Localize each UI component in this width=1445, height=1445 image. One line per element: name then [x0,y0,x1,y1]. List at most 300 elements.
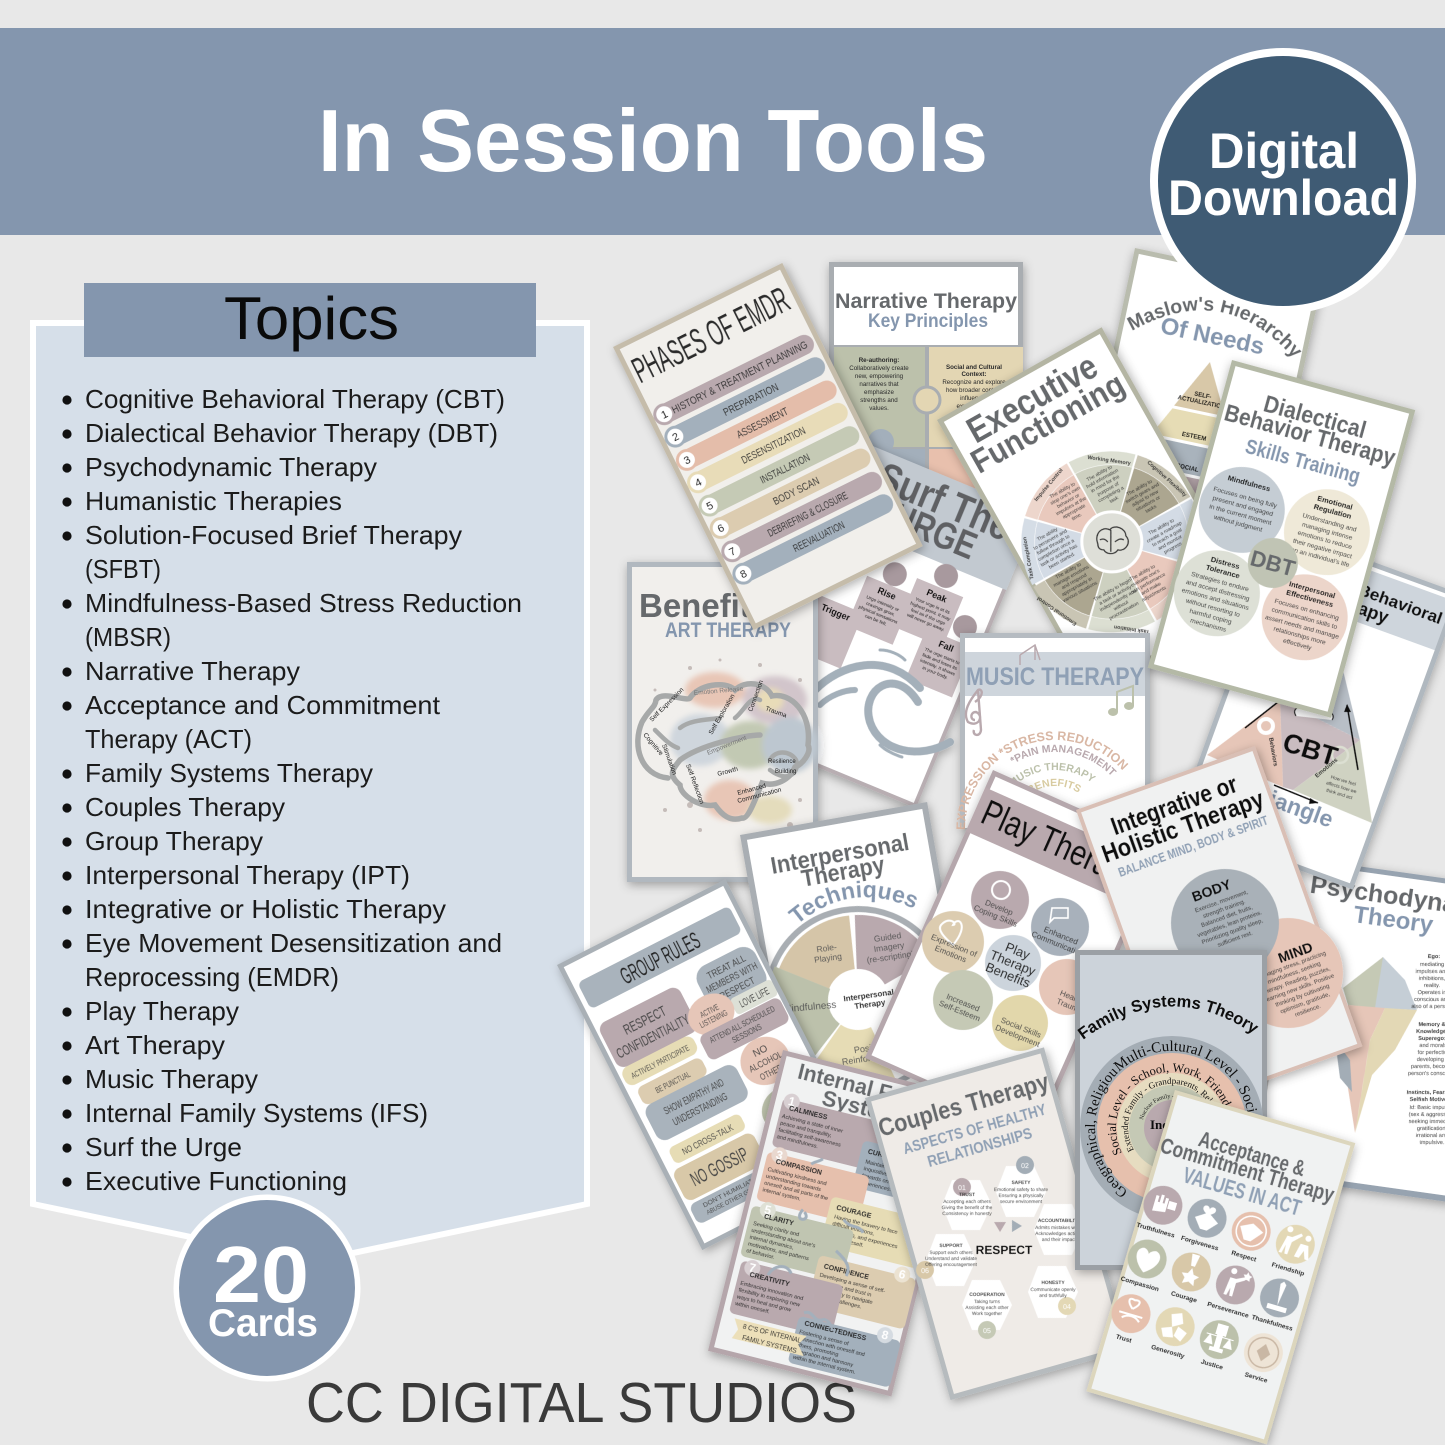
benefit circles: Coping Skills [972,903,1019,929]
topics list: Group Therapy [85,826,263,856]
hexagon diagram: Consistency in honesty [942,1211,992,1217]
peak step: Peak [925,587,949,605]
card: interpersonal therapy techniques: Therapy [799,851,887,893]
circle: body: sufficient rest. [1217,930,1254,949]
hexagon diagram [916,1156,1084,1339]
wheel: Working Memory [1087,455,1131,467]
pie: Positive [853,1041,886,1055]
benefit circles: Emotions [933,944,968,964]
topics list: Eye Movement Desensitization and [85,928,502,958]
block: connectedness: Fostering a sense of [798,1329,849,1347]
wheel: situations or [1135,495,1162,513]
circle: mind [1233,918,1344,1028]
circle: distress tolerance: emotions and situations [1181,587,1250,612]
block: clarity: internal dynamics, [749,1235,795,1251]
card: music therapy [954,630,1157,836]
card: acceptance and commitment therapy: Commitment Therapy [1157,1133,1338,1208]
circle: interpersonal effectiveness: Effectiveness [1285,588,1334,609]
circle: body: vegetables, lean proteins. [1197,910,1263,939]
pie: Guided [873,930,902,944]
card: narrative therapy: Collaboratively create [849,365,909,372]
card: integrative or holistic therapy [1076,732,1402,1110]
iceberg notes: mediating [1420,962,1444,968]
circle: mind: learning new skills. Positive [1265,973,1336,1004]
circle: mind: Managing stress, practicing [1256,951,1327,981]
circle: mindfulness: Focuses on being fully [1213,486,1278,510]
block: creativity: Embracing innovation and [739,1281,804,1302]
benefit circles: Increased [945,992,981,1013]
topics list: Mindfulness-Based Stress Reduction [85,588,522,618]
card: group rules [557,879,871,1250]
card: music therapy: MUSIC THERAPY [966,663,1144,691]
hexagon diagram: Communicate openly [1030,1287,1076,1293]
phase 8: REEVALUATION [791,519,847,555]
triangle: Emotions [1314,757,1340,780]
card: acceptance and commitment therapy: Acceptance & [1196,1126,1308,1181]
icon: generosity [1148,1302,1199,1361]
iceberg notes [1407,954,1445,1146]
hexagon diagram: Giving the benefit of the [942,1205,993,1211]
pie: Interpersonal [843,988,894,1004]
benefit circles: Social Skills [999,1016,1042,1040]
fall step: in your body. [921,665,949,681]
phase 4: DESENSITIZATION [740,425,808,467]
wheel: task [1109,495,1120,505]
benefit circles: Development [994,1023,1042,1049]
peak step: feel as if the urge [910,607,946,627]
wheel: follow through to [1036,534,1071,557]
block: courage: Having the bravery to face [833,1214,898,1236]
circle: emotional regulation [1274,479,1380,585]
rule blobs: MEMBERS WITH [705,961,760,996]
peak step: Your urge is at its [914,597,950,616]
icon: thankfulness [1251,1273,1306,1333]
block: creativity: ways to heal and grow [735,1294,792,1314]
wheel: Task Initiation [1114,623,1150,634]
pie: (re-scripting) [866,949,915,965]
block: calmness: 1 [787,1094,797,1109]
icon: brain with labels: Stimulation [660,743,678,776]
circle: emotional regulation: Regulation [1313,502,1353,521]
wheel: Cognitive Flexibility [1146,460,1187,498]
trigger step: Trigger [820,602,852,623]
hexagon diagram: secure environment [1000,1199,1043,1205]
wheel: stop one's own [1050,485,1082,507]
icon: brain with labels: Communication [737,786,783,805]
topics list: Executive Functioning [85,1166,347,1196]
card: play therapy benefits [843,760,1183,1142]
block: compassion [756,1145,872,1225]
icon: forgiveness [1180,1194,1232,1253]
icon: brain with labels: Enhanced [737,782,767,797]
icon: truthfulness [1136,1181,1188,1240]
topics list: Surf the Urge [85,1132,242,1162]
block: confidence [807,1246,919,1330]
block: creativity: within oneself. [733,1301,771,1316]
card: psychodynamic theory: Theory [1352,901,1435,939]
benefits arcs: BENEFITS [1029,778,1081,792]
block: clarity: of behavior. [746,1248,775,1261]
block: clarity: CLARITY [763,1213,795,1228]
circle: distress tolerance: Strategies to endure [1190,571,1250,593]
icon: music notes [966,645,1133,735]
triangle: How we feel [1330,775,1356,788]
topics list: Acceptance and Commitment [85,690,441,720]
icon: trust [1104,1289,1155,1348]
card: benefits of art therapy: ART THERAPY [665,619,791,642]
rule blobs: NO [751,1043,770,1060]
card: dialectical behavior therapy: Dialectical [1261,391,1369,444]
fall step: intensity. It shows [919,658,956,678]
icon: courage: Courage [1170,1290,1198,1305]
block: compassion: COMPASSION [775,1159,822,1177]
topics list: Family Systems Therapy [85,758,373,788]
topics list: Humanistic Therapies [85,486,342,516]
phase 3: ASSESSMENT [735,406,791,441]
benefit circles: Develop [984,898,1014,917]
block: connectedness: 8 [880,1328,890,1343]
block: clarity: understanding about one's [751,1228,816,1250]
heading: topics: Topics [224,285,399,352]
card: narrative therapy: narratives that [859,381,899,388]
hexagon diagram: Emotional safety to share [994,1187,1048,1193]
benefit circles: Trauma [1055,997,1084,1016]
brand name: CC DIGITAL STUDIOS [306,1371,857,1435]
phase 2: PREPARATION [721,381,781,419]
hexagon diagram: HONESTY [1041,1280,1065,1286]
icon: brain with labels [638,679,809,819]
wheel: and respond [1061,572,1088,591]
block: clarity [740,1198,856,1281]
wheel: The ability to [1049,481,1077,500]
card: narrative therapy: how broader context [946,387,1002,394]
wheel: adjust to new [1131,489,1160,509]
card: narrative therapy: Recognize and explore [942,379,1006,386]
rise step: physical sensations [858,604,899,626]
phase 1: HISTORY & TREATMENT PLANNING [670,339,810,416]
topics list: Art Therapy [85,1030,225,1060]
iceberg notes: impulsive. [1420,1140,1445,1146]
wheel: The ability to [1126,479,1154,498]
badge: digital download [1150,48,1416,314]
title: In Session Tools [318,91,988,190]
phase 4: 4 [693,476,704,490]
card: couples therapy: RELATIONSHIPS [926,1125,1035,1171]
icon: service: Service [1244,1371,1269,1385]
icon: brain with labels: Empowerment [706,735,748,757]
rule blobs: NO GOSSIP [687,1144,752,1191]
phase 5 [695,422,863,520]
card: cbt triangle: CBT Triangle [1195,760,1337,833]
circle: emotional regulation: on an individual's life [1290,546,1350,569]
icon: friendship [1268,1220,1320,1279]
rise step: Urge intensity or [865,595,899,613]
wheel: completion once a [1037,538,1076,563]
rule blobs: RESPECT [621,1003,669,1039]
circle: distress tolerance: mechanisms [1189,617,1228,634]
card: internal family systems: Systems [819,1085,913,1131]
trigger step [793,593,864,669]
card: family systems theory: Family Systems Theory [1077,996,1258,1040]
card: psychodynamic theory [1255,858,1445,1203]
concentric levels: Geographical, Religious [1084,1068,1126,1197]
phase 8 [729,490,897,588]
icon: justice [1192,1315,1244,1374]
block: curiosity: inquisitive attitude [863,1166,907,1183]
card: executive functioning [883,299,1323,753]
block: compassion: understanding towards [765,1174,822,1193]
hexagon diagram: RESPECT [976,1243,1033,1257]
hexagon diagram: TRUST [959,1192,975,1198]
icon: brain with labels: Trauma [764,705,788,720]
block: confidence: one's ability to navigate [815,1286,873,1306]
card: narrative therapy: Key Principles [868,311,988,332]
hexagon diagram: 06 [921,1268,929,1275]
wheel: and monitor [1157,534,1184,552]
wheel: The ability to [1055,562,1083,581]
hexagon diagram: 05 [983,1328,991,1335]
wheel: progress [1163,541,1184,556]
circle: mindfulness: in the current moment [1208,503,1272,527]
phase 6: 6 [716,522,727,536]
rise step: can be felt. [864,613,888,628]
hexagon diagram: Work together [972,1311,1002,1317]
card: maslow's hierarchy: Maslow's Hierarchy [1126,296,1302,357]
phase 3 [672,376,840,475]
topics list: (SFBT) [85,554,161,584]
wheel: a task or activity [1098,584,1133,607]
block: connectedness: connection with oneself and [797,1336,865,1358]
circle: mind: resilience. [1294,1004,1322,1019]
pie: Imagery [873,940,906,954]
circle: emotional regulation: Emotional [1316,494,1354,512]
rule blobs: UNDERSTANDING [671,1091,730,1129]
icon: brain with labels: Connection [747,679,765,713]
concentric levels: Social Level - School, Work, Friends, Neighbors [1107,1063,1232,1155]
pie: Therapy [854,998,886,1011]
benefits arcs: EXPRESSION *STRESS REDUCTION [956,731,1128,834]
wheel: Emotional Control [1036,595,1078,627]
triangle [1207,670,1372,823]
topics list: Play Therapy [85,996,239,1026]
circle: interpersonal effectiveness: Interpersonal [1288,579,1336,600]
card: integrative or holistic therapy: BALANCE MIND, BODY & SPIRIT [1116,812,1270,880]
block: courage: within oneself. [827,1235,865,1249]
circle: body: BODY [1190,876,1234,905]
rise step [846,554,923,645]
pie [770,880,922,1081]
wheel: Impulse Control [1034,467,1065,503]
benefit circles: Expression of [930,932,978,959]
rule blobs: ALCOHOL [747,1049,784,1074]
concentric levels: Extended Family - Grandparents, Relatives [1122,1078,1213,1152]
card: integrative or holistic therapy: Holistic Therapy [1098,785,1268,869]
concentric levels [1080,1036,1263,1214]
circle: interpersonal effectiveness: Focuses on enhancing [1274,598,1340,622]
wheel: been started. [1048,551,1076,571]
wheel: The ability to [1129,564,1157,583]
circle: interpersonal effectiveness: assert needs and manage [1264,614,1340,641]
wheel: switch gears and [1125,482,1160,505]
topics list: Solution-Focused Brief Therapy [85,520,462,550]
circle: distress tolerance: Distress [1210,555,1241,571]
block: calmness: peace and tranquility, [779,1121,832,1139]
hexagon diagram: Offering encouragement [925,1262,977,1268]
heading: topics [84,283,536,357]
card: benefits of art therapy: Benefits [639,587,769,624]
legend: FAMILY SYSTEMS [741,1333,798,1355]
card: cbt triangle [1153,521,1445,890]
hexagon diagram: and truthfully [1039,1293,1067,1299]
icon: compassion: Compassion [1120,1275,1160,1293]
panel: topics [33,283,587,1262]
pie: Reinforcement [841,1049,901,1067]
circle: emotional regulation: emotions to reduce [1297,530,1353,551]
hexagon diagram: 04 [1063,1304,1071,1311]
block: clarity: motivations, and patterns [747,1241,810,1262]
icon: courage [1164,1248,1215,1306]
block: creativity [729,1257,845,1338]
card: surf the urge [741,442,1049,813]
block: creativity: flexibility in exploring new [738,1287,801,1309]
wheel: independently and [1099,588,1138,613]
circle: distress tolerance: and accept distressing [1185,579,1250,603]
card: maslow's hierarchy [1110,247,1324,494]
topics list: Reprocessing (EMDR) [85,962,339,992]
topics list: Therapy (ACT) [85,724,252,754]
fall step: Fall [937,639,955,654]
hexagon diagram: Taking turns [974,1299,1001,1305]
rule blobs: RESPECT [718,976,757,1003]
phase 5: 5 [705,500,715,513]
block: curiosity [852,1140,946,1207]
hexagon diagram: Understand and validate [925,1256,977,1262]
topics list: (MBSR) [85,622,171,652]
block: connectedness: CONNECTEDNESS [804,1320,867,1343]
block: creativity: CREATIVITY [749,1272,791,1289]
block: courage [820,1196,929,1269]
hexagon diagram: and their impact [1042,1237,1077,1243]
wheel: procrastination [1108,601,1140,622]
card: couples therapy: Couples Therapy [875,1068,1052,1143]
card: benefits of art therapy [627,562,818,882]
rule blobs: SESSIONS [731,1022,763,1045]
wheel: time. [1071,512,1083,522]
topics list: Couples Therapy [85,792,285,822]
wheel: adjustments [1141,585,1168,603]
circle: mindfulness: without judgment [1212,514,1263,534]
circle: mindfulness [1189,457,1295,563]
iceberg notes: reality. [1424,983,1440,989]
icon: forgiveness: Forgiveness [1180,1235,1220,1253]
card: narrative therapy: influences [960,395,988,402]
triangle: Behaviors [1267,737,1278,768]
rule blobs: LISTENING [698,1008,729,1030]
circle: distress tolerance: Tolerance [1205,563,1241,581]
card: surf the urge: URGE [885,496,983,568]
rule blobs [595,941,855,1225]
circle: interpersonal effectiveness [1252,564,1358,670]
icon: brain with labels: Growth [717,766,739,778]
icon: brain with labels: Self Reflection [684,763,705,805]
rule blobs: CONFIDENTIALITY [614,1011,693,1062]
card: narrative therapy: Social and Cultural [946,364,1002,371]
rule blobs: ACTIVELY PARTICIPATE [630,1044,691,1081]
rise step: Rise [876,585,897,602]
benefit circles: Communication [1030,929,1085,959]
topics list: Dialectical Behavior Therapy (DBT) [85,418,498,448]
block: connectedness: within the internal system. [791,1354,856,1376]
phase 7: 7 [727,545,738,559]
card: dialectical behavior therapy: Skills Training [1243,435,1363,488]
wheel: and make [1140,581,1162,597]
header band [0,28,1445,235]
card: phases of emdr: PHASES OF EMDR [626,279,796,391]
wheel: behavior or [1056,492,1081,510]
circle: interpersonal effectiveness: relationships more [1273,626,1327,647]
fall step: fade and loses its [921,652,959,672]
hexagon diagram: 02 [1021,1163,1029,1170]
rule blobs: LOVE LIFE [737,985,771,1011]
wheel: tasks [1145,504,1158,515]
icon: brain with labels: Resilience [768,759,796,765]
pie: Techniques [787,880,917,922]
icon: truthfulness: Truthfulness [1136,1222,1176,1240]
pie: Playing [813,951,843,965]
circle: emotional regulation: their negative impact [1292,538,1353,560]
card: executive functioning: Functioning [964,365,1131,480]
hexagon diagram: ACCOUNTABILITY [1038,1218,1081,1224]
circle: interpersonal effectiveness: communication skills to [1271,606,1338,631]
pyramid: ESTEEM [1181,432,1207,443]
splatter [670,672,818,824]
block: calmness: and mindfulness. [776,1134,819,1150]
wheel: own performance [1130,572,1167,596]
benefit circles: Play [1003,939,1032,963]
card: narrative therapy [829,262,1023,509]
circle: emotional regulation: managing intense [1301,521,1353,542]
block: calmness [771,1092,887,1171]
icon: perseverance [1206,1260,1262,1320]
card: surf the urge: Surf The [871,453,1018,550]
icon: brain with labels: Self Expression [648,686,686,723]
iceberg notes: Ego: [1428,954,1440,960]
pyramid [1106,346,1283,521]
circle: mind: optimism, gratitude, [1280,992,1331,1015]
badge: 20 cards: Cards [208,1302,318,1345]
icon: brain with labels: Cognitive [641,732,664,757]
benefit circles: Healing [1059,988,1087,1007]
card: maslow's hierarchy: Of Needs [1158,312,1267,361]
wheel: appropriate [1062,503,1087,520]
wheel [998,428,1225,655]
wheel: in mind for the [1090,474,1121,495]
card: family systems theory [1070,947,1274,1279]
card: acceptance and commitment therapy [1086,1090,1355,1444]
legend [730,1318,808,1357]
triangle: CBT [1279,727,1342,772]
benefit circles: Benefits [983,959,1033,991]
icon: service [1236,1328,1288,1387]
block: connectedness [788,1306,903,1388]
wheel: appropriately in [1061,576,1094,598]
circle: dbt hub: DBT [1248,545,1298,582]
block: compassion: 3 [774,1148,785,1163]
topics list: Narrative Therapy [85,656,300,686]
block: compassion: oneself and all parts of the [763,1180,829,1202]
card: couples therapy [849,1045,1138,1405]
card: cbt triangle: Cognitive Behavioral [1277,551,1445,628]
